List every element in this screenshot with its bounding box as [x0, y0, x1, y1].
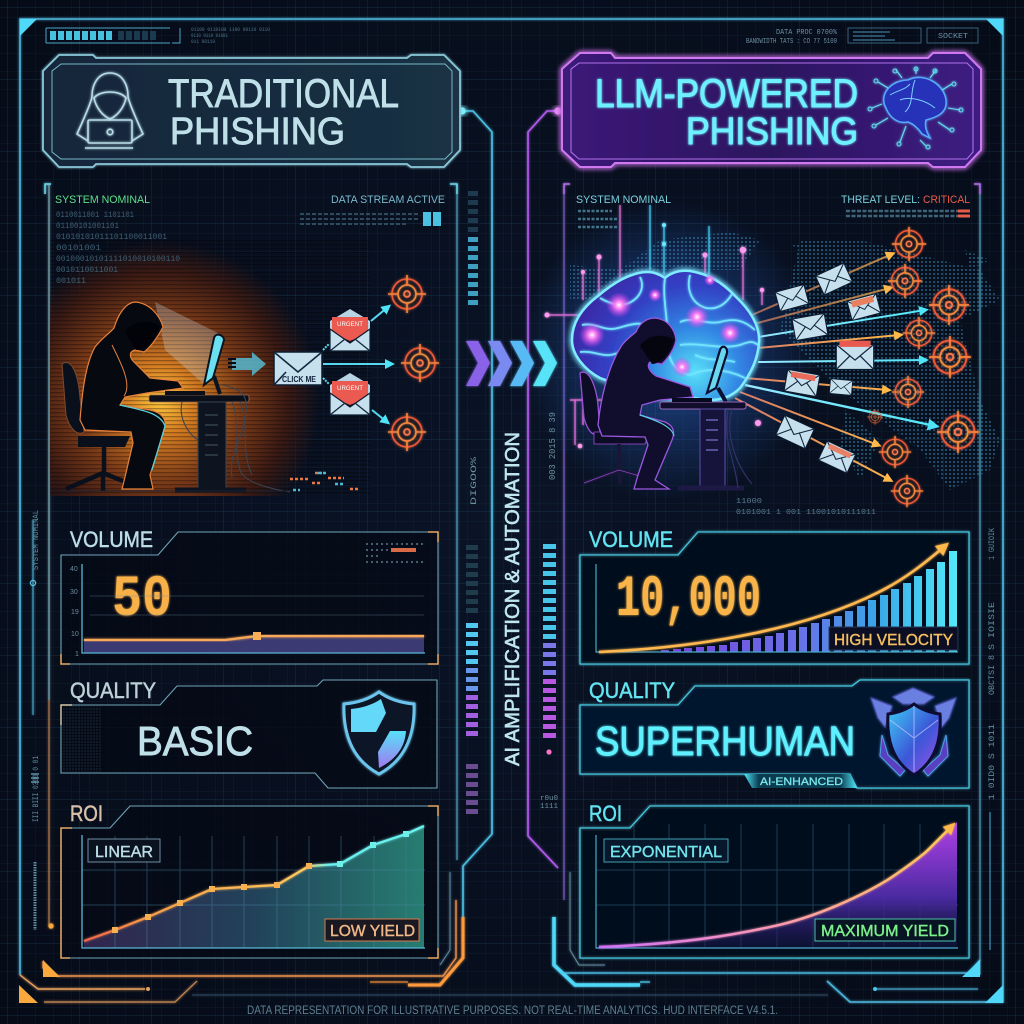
- heading: volume: VOLUME: [70, 527, 153, 552]
- data fragments: [290, 473, 358, 490]
- line chart: 10: [71, 631, 79, 638]
- envelope: urgent bottom: URGENT: [337, 386, 363, 392]
- status label: threat level critical: CRITICAL: [923, 194, 970, 206]
- binary data stream: 0010110011001: [56, 266, 118, 275]
- right strip readouts: OBCTSI 8: [988, 655, 997, 695]
- binary caption: 0101001 1 001 11001010111011: [736, 509, 877, 517]
- right strip readouts: S IOISIE: [988, 602, 997, 650]
- envelope: urgent top: URGENT: [337, 322, 363, 328]
- left progress column: [466, 191, 479, 814]
- binary data stream: 01100101001101: [56, 222, 119, 231]
- heading: traditional phishing: PHISHING: [170, 111, 345, 153]
- envelope: click me: [274, 352, 322, 385]
- heading: traditional phishing: TRADITIONAL: [168, 72, 399, 116]
- binary data stream: 00100010101111010010100110: [56, 255, 180, 264]
- heading: quality: QUALITY: [70, 678, 156, 703]
- envelope: urgent bottom: [330, 373, 370, 415]
- binary data stream: [56, 211, 180, 286]
- binary data stream: 01010101011101100011001: [56, 233, 167, 242]
- status label: system nominal: SYSTEM NOMINAL: [55, 194, 150, 206]
- line chart: 40: [70, 566, 78, 573]
- bar chart: [661, 551, 957, 652]
- right strip readouts: 1 0ID0 S 1011: [988, 724, 997, 800]
- world map: [570, 232, 1000, 490]
- right strip readouts: 1 GUIOIK: [988, 528, 997, 560]
- illustration: hacker at desk: [60, 302, 290, 492]
- area chart: [596, 822, 958, 948]
- icon: target top: [388, 275, 426, 313]
- icon: hooded hacker with laptop: [77, 73, 143, 148]
- top-right data readout: BANDWIDTH TATS : CO 77 5100: [746, 38, 837, 46]
- top-right data readout: SOCKET: [938, 33, 968, 41]
- connector dots: [458, 107, 562, 115]
- title panel: traditional phishing: [43, 55, 460, 167]
- panel: traditional scene: [50, 194, 445, 496]
- icon: target bottom: [388, 413, 426, 451]
- top-right data readout: [746, 28, 978, 46]
- right progress column: [540, 412, 558, 811]
- data stream arrow: [232, 352, 266, 376]
- top-right data readout: DATA PROC 0700%: [776, 29, 838, 37]
- envelopes: [775, 263, 881, 473]
- panel: ROI traditional: [61, 801, 438, 958]
- illustration: glowing brain: [572, 271, 759, 400]
- heading: LLM-powered phishing: PHISHING: [686, 111, 858, 153]
- panel: LLM scene: [520, 194, 1000, 517]
- center chevrons: [466, 341, 557, 386]
- line chart: [70, 564, 425, 658]
- circuit traces: [547, 205, 762, 445]
- tag: ai-enhanced: [744, 774, 857, 788]
- status label: system nominal: SYSTEM NOMINAL: [576, 194, 671, 206]
- line chart: [82, 826, 425, 948]
- value: superhuman: SUPERHUMAN: [595, 718, 855, 764]
- brain nodes: [579, 274, 741, 377]
- tag: exponential: [604, 839, 728, 862]
- attack rays: [735, 254, 935, 480]
- top-left status bar: 0110 0110 01001: [191, 33, 228, 39]
- top-left status bar: 011 00110: [191, 39, 215, 45]
- panel: quality traditional: [61, 678, 437, 788]
- heading: ROI: ROI: [589, 801, 622, 826]
- right progress column: r0u0: [540, 795, 558, 803]
- tag: maximum yield: MAXIMUM YIELD: [821, 923, 949, 940]
- icon: crystal shield: [871, 688, 956, 776]
- binary data stream: 001011: [56, 277, 86, 286]
- value: 10,000: 10,000: [616, 568, 761, 633]
- heading: LLM-powered phishing: [595, 72, 858, 153]
- heading: LLM-powered phishing: LLM-POWERED: [595, 72, 858, 116]
- line chart: 19: [71, 609, 79, 616]
- value: basic: BASIC: [137, 718, 253, 764]
- tag: linear: [88, 839, 160, 862]
- binary data stream: 0110011001 1101101: [56, 211, 134, 220]
- light beam from monitor: [155, 302, 222, 385]
- icon: neural brain: [868, 67, 963, 149]
- top-left status bar: 01100 0110100 1100 00110 0110: [191, 27, 270, 33]
- right progress column: 003 2015 8 39: [548, 412, 558, 480]
- binary caption: [736, 498, 877, 517]
- illustration: hacker at desk: [580, 318, 752, 489]
- data bars top right: [300, 212, 437, 226]
- right strip readouts: [988, 528, 997, 950]
- panel: volume LLM: [580, 527, 969, 664]
- heading: traditional phishing: [168, 72, 399, 153]
- tag: ai-enhanced: AI-ENHANCED: [760, 776, 843, 788]
- binary data stream: 00101001: [56, 244, 101, 253]
- right progress column: 1111: [540, 803, 558, 811]
- left progress column: DIGOO%: [470, 457, 479, 505]
- left strip readouts: III BIII 0300 0 01: [32, 756, 41, 822]
- panel: quality LLM: [580, 678, 969, 788]
- mini readout: [366, 544, 424, 562]
- panel: volume traditional: [61, 527, 438, 664]
- tag: linear: LINEAR: [95, 844, 153, 861]
- tag: low yield: LOW YIELD: [330, 923, 415, 940]
- status label: threat level critical: THREAT LEVEL:: [841, 194, 920, 206]
- data bars: [578, 211, 970, 227]
- status label: data stream active: DATA STREAM ACTIVE: [331, 194, 445, 206]
- footer disclaimer: DATA REPRESENTATION FOR ILLUSTRATIVE PURPOSES. NOT REAL-TIME ANALYTICS. HUD INTERFACE V4.5.1.: [247, 1005, 778, 1017]
- heading: ROI: ROI: [70, 801, 103, 826]
- center vertical label: AI AMPLIFICATION & AUTOMATION: [502, 432, 524, 766]
- envelope: click me: CLICK ME: [282, 374, 316, 384]
- line chart: 30: [70, 589, 78, 596]
- left strip readouts: [30, 510, 41, 930]
- title panel: LLM-powered phishing: [562, 53, 981, 167]
- targets: [867, 227, 979, 507]
- left strip readouts: SYSTEM NOMINAL: [32, 510, 41, 570]
- status label: threat level critical: [841, 194, 970, 206]
- panel: ROI LLM: [580, 801, 969, 958]
- envelope: urgent top: [330, 309, 370, 351]
- trend arrow: [599, 546, 945, 652]
- value: 50: 50: [112, 568, 172, 633]
- icon: target middle: [401, 344, 439, 382]
- heading: quality: QUALITY: [589, 678, 675, 703]
- line chart: 1: [75, 651, 79, 658]
- heading: volume: VOLUME: [589, 527, 673, 552]
- arrows to targets: [323, 307, 391, 422]
- icon: broken shield: [344, 692, 414, 774]
- top-left status bar: [46, 27, 270, 45]
- binary caption: 11000: [736, 498, 763, 506]
- tag: exponential: EXPONENTIAL: [610, 844, 722, 861]
- tag: high velocity: HIGH VELOCITY: [834, 632, 953, 649]
